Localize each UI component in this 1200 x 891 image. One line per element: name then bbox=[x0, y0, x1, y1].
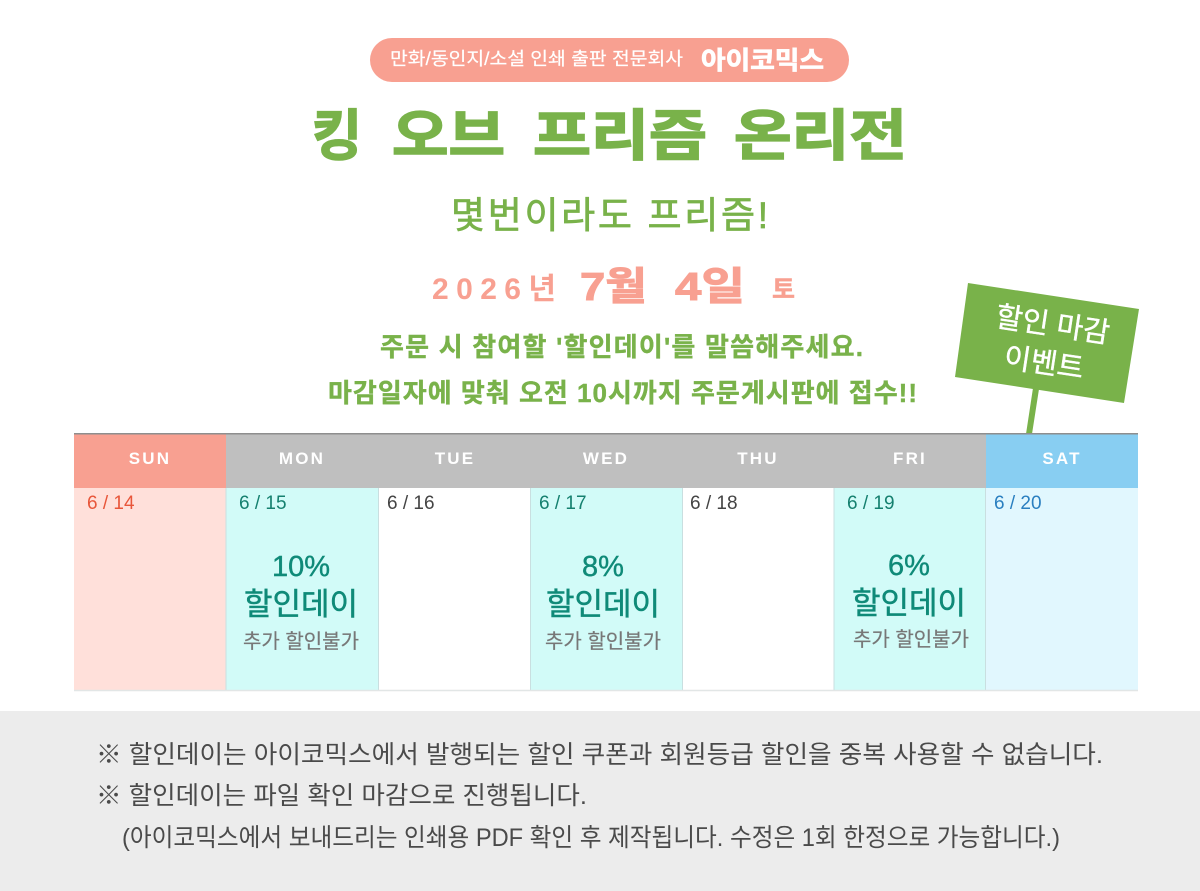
footer notes panel: (아이코믹스에서 보내드리는 인쇄용 PDF 확인 후 제작됩니다. 수정은 1회 한정으로 가능합니다.) bbox=[122, 824, 1060, 852]
title bbox=[312, 105, 907, 167]
discount day: 10 percent: 할인데이 bbox=[244, 587, 358, 622]
discount day: 6 percent: 추가 할인불가 bbox=[853, 628, 969, 651]
calendar dates: 6 / 16 bbox=[387, 493, 435, 514]
calendar dates: 6 / 19 bbox=[847, 493, 895, 514]
event date: 토 bbox=[772, 276, 795, 304]
calendar dates: 6 / 15 bbox=[239, 493, 287, 514]
calendar table bbox=[74, 433, 1138, 690]
discount day: 8 percent: 할인데이 bbox=[546, 587, 660, 622]
calendar dates: 6 / 20 bbox=[994, 493, 1042, 514]
calendar weekday header: SUN bbox=[129, 449, 171, 468]
event date: 4일 bbox=[675, 266, 745, 309]
discount day: 10 percent: 추가 할인불가 bbox=[243, 630, 359, 653]
title: 프리즘 bbox=[533, 105, 707, 167]
order instructions bbox=[328, 332, 917, 408]
header pill: company banner: 만화/동인지/소설 인쇄 출판 전문회사 bbox=[390, 49, 683, 69]
sign: discount deadline event bbox=[955, 283, 1139, 434]
title: 킹 bbox=[312, 105, 362, 167]
calendar weekday header: WED bbox=[583, 449, 629, 468]
calendar weekday header: THU bbox=[737, 449, 779, 468]
event date: 7월 bbox=[580, 266, 647, 309]
sign: discount deadline event: 이벤트 bbox=[1002, 342, 1086, 386]
calendar dates: 6 / 18 bbox=[690, 493, 738, 514]
footer notes panel: ※ 할인데이는 파일 확인 마감으로 진행됩니다. bbox=[96, 782, 587, 810]
calendar weekday header bbox=[74, 433, 1138, 488]
discount day: 6 percent: 6% bbox=[888, 550, 930, 582]
calendar dates: 6 / 14 bbox=[87, 493, 135, 514]
discount day: 6 percent bbox=[852, 550, 969, 651]
footer notes panel: ※ 할인데이는 아이코믹스에서 발행되는 할인 쿠폰과 회원등급 할인을 중복 사용할 수 없습니다. bbox=[96, 741, 1103, 769]
discount day: 6 percent: 할인데이 bbox=[852, 586, 966, 621]
calendar dates: 6 / 17 bbox=[539, 493, 587, 514]
discount day: 8 percent: 추가 할인불가 bbox=[545, 630, 661, 653]
footer notes panel bbox=[0, 711, 1200, 891]
title: 온리전 bbox=[734, 105, 907, 167]
order instructions: 마감일자에 맞춰 오전 10시까지 주문게시판에 접수!! bbox=[328, 378, 917, 408]
header pill: company banner: 아이코믹스 bbox=[701, 47, 824, 75]
subtitle: 몇번이라도 프리즘! bbox=[451, 195, 768, 236]
sign: discount deadline event: 할인 마감 bbox=[994, 300, 1112, 350]
calendar day cells bbox=[74, 488, 1138, 690]
header pill: company banner bbox=[370, 38, 849, 82]
calendar dates bbox=[87, 493, 1042, 514]
event date bbox=[432, 266, 795, 309]
calendar weekday header: SAT bbox=[1042, 449, 1082, 468]
discount day: 10 percent bbox=[243, 551, 359, 653]
calendar weekday header: MON bbox=[279, 449, 325, 468]
discount day: 8 percent bbox=[545, 551, 661, 653]
order instructions: 주문 시 참여할 '할인데이'를 말씀해주세요. bbox=[380, 332, 863, 362]
discount day: 8 percent: 8% bbox=[582, 551, 624, 583]
discount day: 10 percent: 10% bbox=[272, 551, 330, 583]
calendar weekday header: FRI bbox=[893, 449, 927, 468]
title: 오브 bbox=[392, 105, 505, 167]
calendar weekday header: TUE bbox=[435, 449, 475, 468]
event date: 2026년 bbox=[432, 273, 556, 306]
